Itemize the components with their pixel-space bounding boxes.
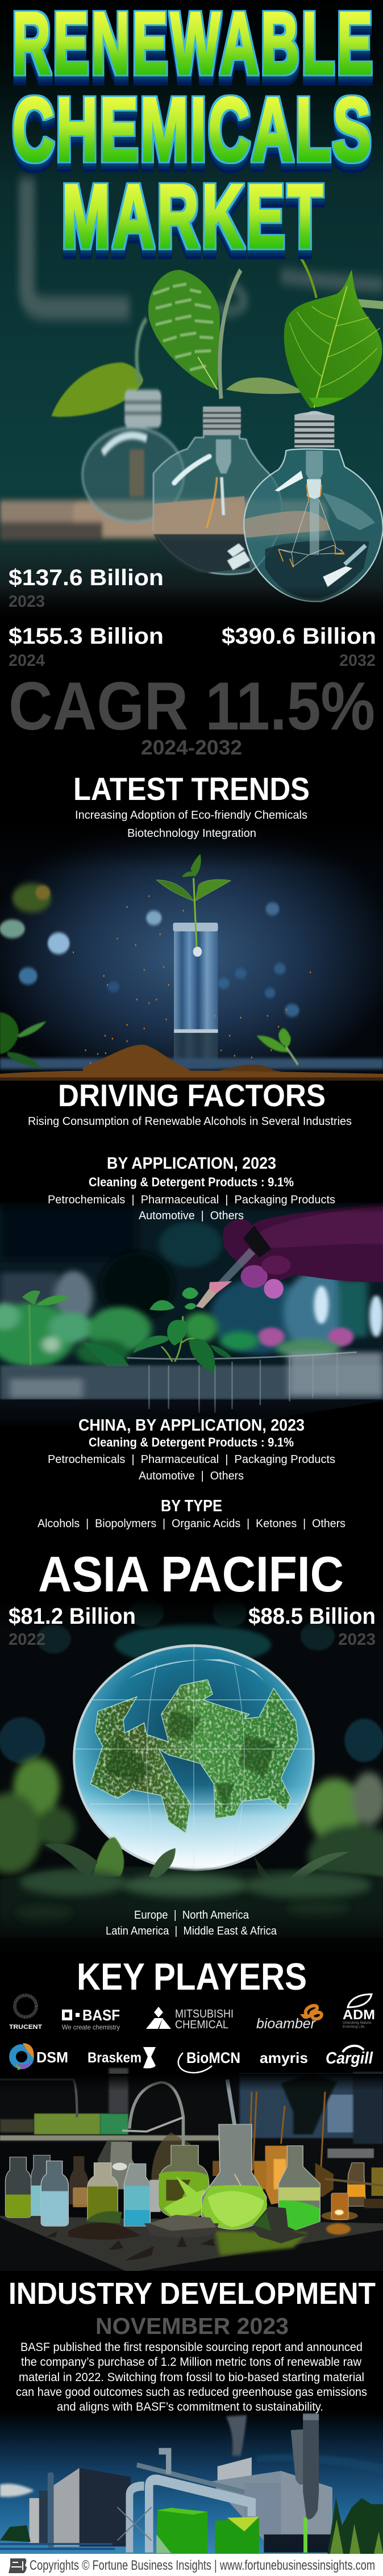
logo: BioAmber: bioamber bbox=[256, 2016, 317, 2032]
region list: Europe | North America bbox=[134, 1909, 249, 1921]
icon: lower horizontal leaf bbox=[226, 377, 304, 394]
section: by application 2023: BY APPLICATION, 2023 bbox=[107, 1154, 276, 1173]
icon: middle bottles bbox=[88, 2142, 161, 2226]
icon: middle bulb bbox=[153, 407, 282, 574]
market size figures bbox=[9, 565, 376, 670]
icon: left building bbox=[30, 2468, 131, 2548]
stat: 2023: 2023 bbox=[338, 1631, 376, 1649]
logo: Braskem bbox=[88, 2047, 156, 2068]
icon: test tube bbox=[173, 923, 218, 1068]
icon: large erlenmeyer flask bbox=[202, 2124, 267, 2229]
icon: pipework bbox=[0, 2451, 252, 2553]
stat: 2022: $81.2 Billion bbox=[9, 1604, 136, 1629]
icon: glass globe bbox=[73, 1645, 315, 1871]
icon: left seedling bbox=[0, 1012, 47, 1068]
clouds bbox=[0, 2484, 34, 2497]
icon: front bulb bbox=[244, 398, 383, 602]
title: CHEMICALS bbox=[13, 80, 371, 180]
stat: 2023 bbox=[248, 1604, 376, 1649]
icon: green tanks bbox=[156, 2508, 306, 2553]
logo: BASF: BASF bbox=[82, 2007, 120, 2024]
heading: industry development: NOVEMBER 2023 bbox=[95, 2313, 289, 2339]
section: by type: Alcohols | Biopolymers | Organic Acids | Ketones | Others bbox=[38, 1518, 345, 1530]
section: china by application: Automotive | Others bbox=[139, 1470, 244, 1482]
stat: 2024: $155.3 Billion bbox=[9, 624, 164, 649]
bench top bbox=[0, 2216, 383, 2273]
icon: tree lines bbox=[0, 2498, 383, 2554]
logo: DSM bbox=[13, 2043, 68, 2070]
text block: development paragraph: and aligns with BASF’s commitment to sustainability. bbox=[57, 2400, 323, 2414]
back orange glassware bbox=[213, 2146, 383, 2208]
background plants bbox=[0, 1303, 218, 1368]
stat: 2023: 2023 bbox=[9, 593, 45, 611]
icon: right flask bbox=[278, 2146, 320, 2230]
continents bbox=[90, 1679, 298, 1833]
panel: company logos bbox=[9, 1994, 375, 2073]
stat: 2032: $390.6 Billion bbox=[222, 624, 376, 649]
logo: Amyris: amyris bbox=[260, 2049, 308, 2066]
icon: big right leaf bbox=[284, 270, 382, 408]
stat: 2023 bbox=[9, 565, 164, 611]
heading: driving factors: Rising Consumption of Renewable Alcohols in Several Industries bbox=[28, 1115, 352, 1128]
logo: ADM: Unlocking Nature. bbox=[343, 2021, 372, 2025]
logo: Mitsubishi Chemical: MITSUBISHI bbox=[175, 2008, 234, 2020]
logo: Cargill: Cargill bbox=[326, 2049, 373, 2068]
logo: ADM: Enriching Life. bbox=[343, 2025, 365, 2029]
panel: hero photo with light-bulb plants bbox=[0, 50, 383, 605]
icon: gloved hand with dropper bbox=[196, 1203, 383, 1308]
icon: central seedling bbox=[133, 1287, 232, 1373]
regional figures bbox=[9, 1604, 376, 1649]
text block: development paragraph: can have good outcomes such as reduced greenhouse gas emissions bbox=[16, 2386, 367, 2399]
logo: BioMCN: BioMCN bbox=[186, 2049, 240, 2066]
heading: latest trends: Biotechnology Integration bbox=[127, 827, 256, 840]
icon: middle patterned leaf bbox=[136, 270, 220, 390]
title: MARKET bbox=[62, 166, 323, 267]
text block: development paragraph: material in 2022. Switching from fossil to bio-based starting material bbox=[19, 2371, 364, 2384]
heading: asia pacific: ASIA PACIFIC bbox=[38, 1546, 344, 1602]
icon: Fortune Business Insights logo bbox=[9, 2558, 27, 2573]
heading: latest trends: Increasing Adoption of Eco-friendly Chemicals bbox=[75, 809, 307, 822]
logo: ADM: ADM bbox=[343, 2007, 375, 2023]
foreground plant sprigs bbox=[22, 1290, 130, 1366]
blurred lab backdrop bbox=[0, 1203, 383, 1358]
stat: 2022 bbox=[9, 1604, 136, 1649]
logo: Mitsubishi Chemical bbox=[146, 2007, 234, 2031]
text block: development paragraph: BASF published the first responsible sourcing report and announced bbox=[20, 2341, 363, 2354]
section: china by application: Cleaning & Detergent Products : 9.1% bbox=[89, 1435, 294, 1449]
heading: latest trends bbox=[73, 771, 310, 840]
logo: Mitsubishi Chemical: CHEMICAL bbox=[175, 2019, 228, 2031]
logo: BASF bbox=[62, 2007, 120, 2031]
heading: driving factors: DRIVING FACTORS bbox=[58, 1078, 326, 1113]
smoke plume bbox=[226, 2415, 247, 2456]
icon: seedling bbox=[156, 854, 231, 947]
stat: 2023: $88.5 Billion bbox=[248, 1604, 376, 1629]
icon: left bottles bbox=[5, 2155, 89, 2226]
icon: right seedling bbox=[257, 1028, 298, 1065]
icon: chimney stacks bbox=[291, 2414, 319, 2519]
blurred table bbox=[0, 500, 327, 540]
soil specks bbox=[73, 896, 310, 1063]
panel: globe photo bbox=[0, 1598, 383, 1960]
meridian grid bbox=[73, 1645, 315, 1871]
CAGR: 2024-2032 bbox=[141, 736, 242, 759]
heading: key players: KEY PLAYERS bbox=[77, 1956, 307, 1998]
heading: industry development bbox=[0, 2271, 383, 2416]
panel: laboratory flasks photo bbox=[0, 2068, 383, 2273]
stat: 2023: $137.6 Billion bbox=[9, 565, 164, 590]
section: china by application bbox=[48, 1416, 335, 1482]
logo: BioMCN bbox=[178, 2049, 240, 2073]
section: by application 2023: Automotive | Others bbox=[139, 1210, 244, 1222]
title bbox=[13, 0, 372, 267]
logo: BASF: We create chemistry bbox=[62, 2023, 120, 2031]
icon: far left leaf bbox=[51, 362, 143, 417]
soil bbox=[0, 1045, 383, 1082]
panel: factory photo bbox=[0, 2411, 383, 2554]
text block: development paragraph bbox=[16, 2341, 367, 2414]
logo: Trucent: TRUCENT bbox=[9, 2024, 42, 2031]
stems bbox=[220, 270, 241, 399]
blurred backdrop pipes bbox=[27, 178, 383, 311]
section: by application 2023 bbox=[48, 1154, 335, 1222]
icon: back bulb bbox=[82, 390, 184, 522]
stat: 2022: 2022 bbox=[9, 1631, 45, 1649]
text block: development paragraph: the company’s purchase of 1.2 Million metric tons of renewable raw bbox=[21, 2356, 362, 2369]
section: by application 2023: Cleaning & Detergent Products : 9.1% bbox=[89, 1175, 294, 1189]
foliage front bbox=[0, 1837, 383, 1937]
stat: 2032 bbox=[222, 624, 376, 670]
footer bar bbox=[0, 2554, 383, 2576]
section: china by application: Petrochemicals | Pharmaceutical | Packaging Products bbox=[48, 1453, 335, 1466]
icon: green round flask bbox=[159, 2145, 209, 2220]
icon: right building bbox=[210, 2457, 332, 2553]
panel: dropper and plants photo bbox=[0, 1198, 383, 1427]
stat: 2032: 2032 bbox=[339, 652, 376, 670]
section: by type bbox=[38, 1497, 345, 1530]
logo: ADM bbox=[343, 1994, 375, 2029]
bokeh lights bbox=[0, 883, 299, 1017]
lab backdrop bbox=[0, 2068, 383, 2273]
stat: 2024: 2024 bbox=[9, 652, 45, 670]
section: china by application: CHINA, BY APPLICATION, 2023 bbox=[78, 1416, 305, 1435]
foliage back bbox=[0, 1758, 383, 1888]
region list: Latin America | Middle East & Africa bbox=[106, 1925, 277, 1937]
region list bbox=[106, 1909, 277, 1937]
logo: Trucent bbox=[9, 1995, 42, 2031]
bokeh backdrop bbox=[0, 1598, 383, 1952]
logo: DSM: DSM bbox=[36, 2049, 68, 2066]
glass tubes row bbox=[0, 1352, 383, 1416]
logo: BioAmber bbox=[256, 2006, 322, 2032]
table and fade to black bbox=[0, 585, 383, 624]
soil and tray bbox=[47, 2206, 308, 2260]
heading: driving factors bbox=[0, 1078, 383, 1137]
panel: test tube seedling photo bbox=[0, 824, 383, 1082]
stat: 2024 bbox=[9, 624, 164, 670]
candle jar bbox=[321, 2193, 358, 2220]
section: by type: BY TYPE bbox=[161, 1497, 222, 1515]
logo: Braskem: Braskem bbox=[88, 2050, 141, 2066]
heading: latest trends: LATEST TRENDS bbox=[73, 771, 310, 807]
section: by application 2023: Petrochemicals | Pharmaceutical | Packaging Products bbox=[48, 1194, 335, 1206]
